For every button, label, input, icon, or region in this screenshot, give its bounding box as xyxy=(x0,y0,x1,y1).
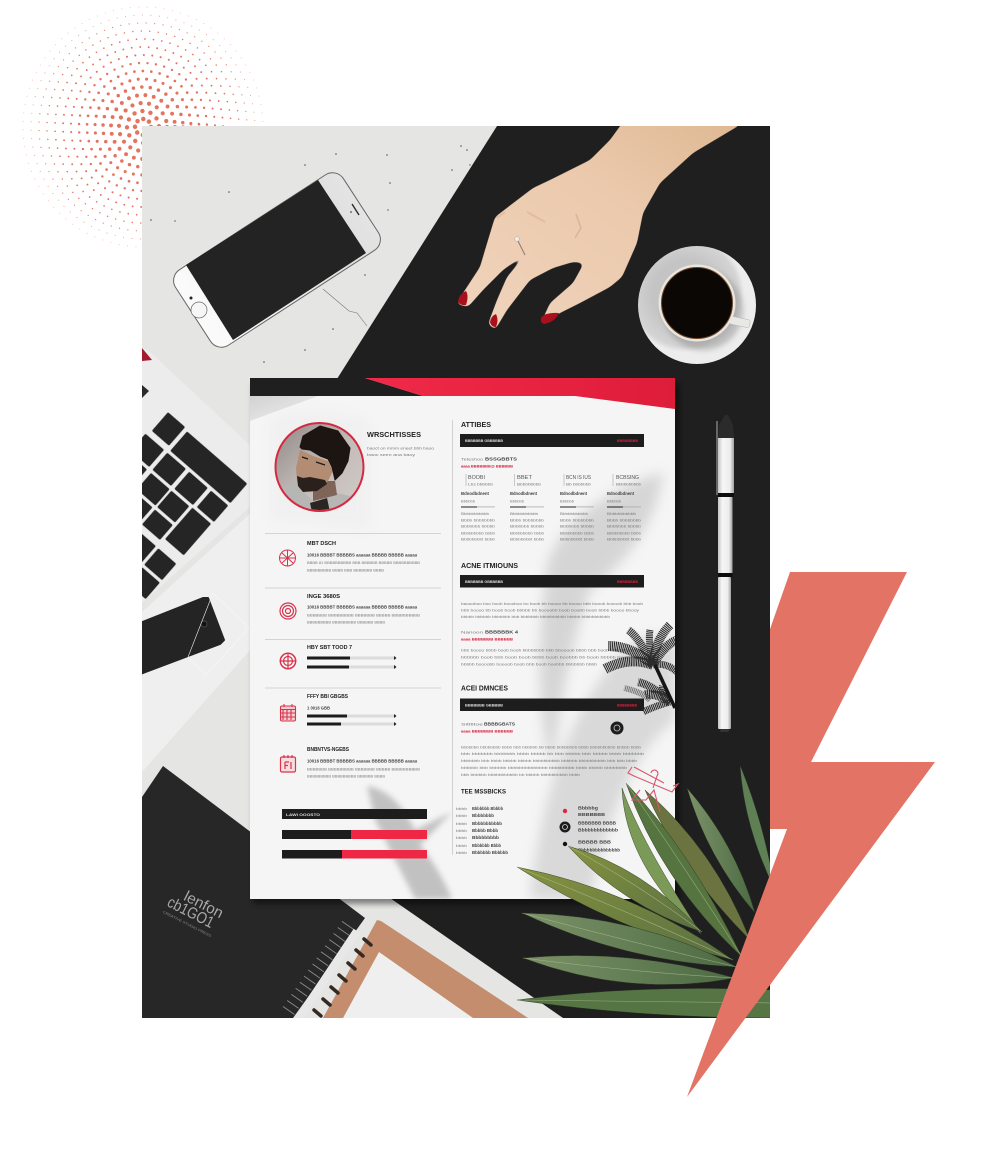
coffee cup xyxy=(638,246,756,364)
header red band xyxy=(365,378,675,409)
section: skills: BBBBBBB BBBBBBBBB BBBBBBB BBBBB BBBBBBBBBB xyxy=(307,614,421,618)
name block xyxy=(367,430,434,457)
right: list heading and list: bbbb xyxy=(456,844,467,848)
black desk area xyxy=(330,126,770,1018)
notebook logo text: cb1GO1 xyxy=(164,894,217,932)
column one: Bbbbbbbbbbb xyxy=(461,512,489,516)
right: attributes: aaaa BBBBBBB@ BBBBBB xyxy=(461,464,513,468)
right: list heading and list: Bbbbb Bbbb xyxy=(472,828,498,833)
name block: WRSCHTISSES xyxy=(367,430,421,439)
column four: Bdnodbdnent xyxy=(607,491,635,496)
ring xyxy=(517,239,525,255)
right: advances: aaaa BBBBBBB BBBBBB xyxy=(461,730,513,734)
experience columns: BCBSING xyxy=(616,475,639,481)
section: profile: BBBB 81 BBBBBBBBBB BBB BBBBBB BBBBB BBBBBBBBBB xyxy=(307,561,420,565)
experience columns: BBET xyxy=(517,475,532,481)
section: skills: BBBBBBBBB BBBBBBBBB BBBBBB BBBB xyxy=(307,620,385,624)
right: achievements: bbbbb bbbbbb bbbbbbb bbb bbbbbbb bbbbbbbbbb bbbbb bbbbbbbbbbb xyxy=(461,615,610,619)
column one: Bbbbbb xyxy=(461,500,475,504)
section: calendar xyxy=(280,747,421,778)
right: attributes: BSSGBBTS xyxy=(485,456,517,462)
right: advances xyxy=(460,686,644,777)
column three: Bbbbbb xyxy=(560,500,574,504)
experience columns: BCN IS IUS xyxy=(566,475,592,481)
column two: Bdnodbdnent xyxy=(510,491,538,496)
right: list heading and list: bbbb xyxy=(456,807,467,811)
black notebook xyxy=(142,766,365,1018)
right: advances: bbbbbbb bbbbbbbb bbbb bbb bbbbbb bb bbbb bbbbbbbb bbbb bbbbbbbbbb bbbbb bbbb xyxy=(461,746,641,750)
resume shadow xyxy=(253,384,679,904)
notebook spiral binding xyxy=(287,925,371,1018)
portrait xyxy=(276,423,364,512)
right contacts: Bbbbbg xyxy=(578,806,599,810)
column two: Bbbbbbbbt bbbb xyxy=(510,538,544,542)
column four: Bbbb bbbbbbbb xyxy=(607,518,641,522)
right: achievements: aaaa BBBBBBB BBBBBB xyxy=(461,638,513,642)
section: profile: BBBBBBBBB BBBB BBB BBBBBBB BBBB xyxy=(307,568,384,572)
right: list heading and list: Bbbbbbbbbbb xyxy=(472,821,502,826)
right: advances: BBBBBBB GBBBBB xyxy=(465,702,503,708)
name block: baoc seen ana baoy xyxy=(367,453,415,457)
small dark corner xyxy=(142,385,149,398)
lightning bolt upper part xyxy=(700,572,935,829)
column four: Bbbbbbbbt bbbb xyxy=(607,538,641,542)
column one: Bbbbbbb bbbbb xyxy=(461,524,495,528)
white page on clipboard xyxy=(343,952,473,1018)
right: list heading and list: bbbb xyxy=(456,814,467,818)
column four: Bbbbbbb bbbbb xyxy=(607,524,641,528)
lightning bolt lower part xyxy=(687,762,935,1097)
section: progress two: FFFY BBI GBGBS xyxy=(307,694,349,700)
right: advances: Sitititoe xyxy=(461,722,483,726)
surface crack xyxy=(323,289,367,326)
right: list heading and list xyxy=(456,788,508,855)
right: advances: bbb bbbbbbb bbbbbbb bbbb bbbbb bb bbb bbbbb bbb bbbbb bbbb bbbbbbb xyxy=(461,752,644,756)
laptop lower panel xyxy=(142,512,252,772)
right: list heading and list: Bbbbbbbb xyxy=(472,813,494,818)
column four: Bbbbbbbbbbb xyxy=(607,512,636,516)
column one: Bbbb bbbbbbbb xyxy=(461,518,495,522)
keyboard xyxy=(142,412,248,599)
section: skills: 10016 BBBBT BBBBBS aaaaaa BBBBB BBBBB aaaaa xyxy=(307,604,418,610)
laptop body xyxy=(142,347,252,603)
halftone dot circle xyxy=(23,7,263,247)
right: advances: ACEI DMNCES xyxy=(461,686,508,692)
right: list heading and list: TEE MSSBICKS xyxy=(461,788,507,796)
section: skills xyxy=(280,594,421,624)
column four xyxy=(607,491,641,542)
section: progress one: HBY SBT TOOD 7 xyxy=(307,645,352,651)
right: achievements: BBBBBBK 4 xyxy=(485,630,519,634)
section: profile: MBT DSCH xyxy=(307,541,336,547)
leaf shadows on sheet xyxy=(270,410,675,899)
right contacts: BBBBBBB BBBB xyxy=(578,820,616,826)
right: advances: bbbbbbb bbb bbbb bbbbb bbbbb bbbbbbbbbb bbbbbb bbbbbbbbbb bbb bbb bbbb xyxy=(461,759,637,763)
pen xyxy=(716,415,734,732)
right contacts: BBBBBBB xyxy=(578,812,605,817)
right: advances: BBBBGBATS xyxy=(484,722,515,726)
column one xyxy=(461,491,495,542)
column four: Bbbbbb xyxy=(607,500,621,504)
right: achievements: bbbbb boooobb boooob boob bbb boob boobbb bbbbbbb bbbb xyxy=(461,662,597,666)
right: achievements: baoooboo boo boob boooboo bo boob bb boooo bb boooo bbb booob boooob bbb boob xyxy=(461,602,643,606)
section: progress two xyxy=(280,694,396,726)
palm illustration xyxy=(605,625,677,712)
right: list heading and list: bbbb xyxy=(456,836,467,840)
small phone xyxy=(135,593,249,676)
right: achievements: Nanoon xyxy=(461,630,483,634)
column three: Bbbbbbb bbbbb xyxy=(560,524,594,528)
right: achievements: bbb boooo bbbb boob boob bbbbbbbb bbb bboooob bbbb bbb boob bbb bbbbb bbb xyxy=(461,648,643,652)
right: advances: BBBBBBBB xyxy=(617,704,637,708)
right: achievements: BBBBBBB GBBBBBB xyxy=(465,579,503,584)
desk photo xyxy=(142,126,770,1018)
right: achievements: bbbbbb boob bbb boob boob bbbb boob boobbb bb boob bbbbb boob bbbb xyxy=(461,656,643,660)
section: progress one xyxy=(280,645,396,669)
column four: Bbbbbbbbb bbbb xyxy=(607,532,641,536)
right contacts: Bbbbbbbbbbbbb xyxy=(578,828,619,832)
right: attributes: BBBBBBB GBBBBBB xyxy=(465,438,503,443)
surface specks xyxy=(150,145,471,363)
column three: Bbbbbbbbb bbbb xyxy=(560,532,594,536)
header grey wedge xyxy=(250,396,318,421)
column three: Bbbb bbbbbbbb xyxy=(560,518,594,522)
right: attributes xyxy=(460,422,644,468)
left rules xyxy=(265,534,441,688)
right: list heading and list: Bbbbbbb Bbbbbb xyxy=(472,850,508,855)
smartphone xyxy=(169,168,385,352)
right: achievements: ACNE ITMIOUNS xyxy=(461,563,518,570)
column two: Bbbbbbbbbbb xyxy=(510,512,538,516)
right: attributes: Teteshoo xyxy=(461,458,483,462)
right: advances: bbbbbb bbb bbbbbb bbbbbbbbbbbbbb bbbbbbbbb bbbb bbbbb bbbbbbbb xyxy=(461,766,627,770)
column two: Bbbb bbbbbbbb xyxy=(510,518,544,522)
right: attributes: ATTIBES xyxy=(461,422,491,429)
column two xyxy=(510,491,544,542)
column three: Bdnodbdnent xyxy=(560,491,588,496)
left bars: LAWI OOOSTO xyxy=(286,812,320,817)
resume sheet xyxy=(250,378,677,899)
section: progress two: 1 0016 GBB xyxy=(307,706,330,710)
section: skills: INGE 3680S xyxy=(307,594,341,600)
column three: Bbbbbbbbbbb xyxy=(560,512,588,516)
left bars xyxy=(282,809,427,858)
experience columns: BOOBI xyxy=(468,475,485,481)
right: list heading and list: bbbb xyxy=(456,822,467,826)
experience columns: Lbs bbbbbb xyxy=(468,482,493,486)
copper clipboard xyxy=(323,920,528,1018)
right: achievements: BBBBBBBB xyxy=(617,580,638,584)
column one: Bbbbbbbbt bbbb xyxy=(461,538,495,542)
column one: Bdnodbdnent xyxy=(461,491,490,496)
column two: Bbbbbbbbb bbbb xyxy=(510,532,544,536)
experience columns: Bb bbbbbbb xyxy=(566,482,591,486)
right: list heading and list: bbbb xyxy=(456,829,467,833)
experience columns: Bbbbbbbbb xyxy=(517,482,541,486)
column three xyxy=(560,491,594,542)
column three: Bbbbbbbbt bbbb xyxy=(560,538,594,542)
right contacts xyxy=(560,806,620,852)
section: calendar: 10016 BBBBT BBBBBS aaaaaa BBBBB BBBBB aaaaa xyxy=(307,758,418,764)
header black band xyxy=(250,378,423,396)
section: profile xyxy=(280,541,420,572)
section: calendar: BNBNTVS-NGEBS xyxy=(307,747,350,753)
right: list heading and list: Bbbbbbb Bbbb xyxy=(472,843,501,848)
plant leaves xyxy=(517,765,775,1018)
right: achievements xyxy=(460,563,644,666)
section: calendar: BBBBBBB BBBBBBBBB BBBBBBB BBBBB BBBBBBBBBB xyxy=(307,768,421,772)
right: achievements: bbb boooo bb boob boob bbbbb bb boooobb boob boobb boob bbbb boooo bbooy xyxy=(461,608,639,612)
paper clip xyxy=(628,767,678,812)
column divider xyxy=(452,420,453,855)
experience columns: Bbbbbbbbbb xyxy=(616,482,641,486)
notebook logo text: CREATIVE STUDIO PRESS xyxy=(162,910,213,938)
nails xyxy=(458,291,559,327)
right: attributes: BBBBBBBB xyxy=(617,439,638,443)
column one: Bbbbbbbbb bbbb xyxy=(461,532,495,536)
right: list heading and list: bbbb xyxy=(456,851,467,855)
experience columns xyxy=(461,474,641,542)
marble surface xyxy=(142,126,563,1018)
right: list heading and list: Bbbbbbbbb xyxy=(472,835,499,840)
section: profile: 10016 BBBBT BBBBBS aaaaaa BBBBB BBBBB aaaaa xyxy=(307,552,418,558)
notebook logo text: lenfon xyxy=(181,888,226,922)
right: list heading and list: Bbbbbbb Bbbbb xyxy=(472,806,503,811)
column two: Bbbbbbb bbbbb xyxy=(510,524,544,528)
black badge icon xyxy=(610,722,624,734)
hand xyxy=(456,122,745,330)
section: calendar: BBBBBBBBB BBBBBBBBB BBBBBB BBBB xyxy=(307,774,385,778)
name block: baoct on mmm eneet bbb baoo xyxy=(367,446,434,450)
right contacts: BBBBB BBB xyxy=(578,840,611,844)
right: advances: bbb bbbbbb bbbbbbbbbbb bb bbbbb bbbbbbbbbb bbbb xyxy=(461,773,580,777)
red corner xyxy=(142,348,152,361)
column two: Bbbbbb xyxy=(510,500,524,504)
right contacts: Bbbbbbbbbbbbbbb xyxy=(578,848,620,852)
